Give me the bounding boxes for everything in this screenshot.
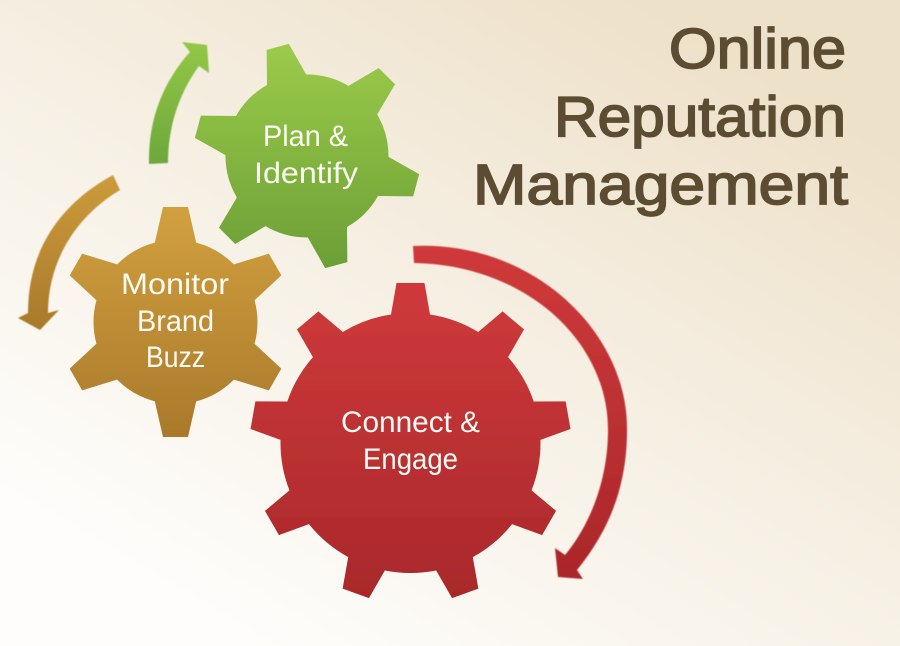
arrow: green, rising toward the top <box>149 42 209 164</box>
label: Plan & Identify: Identify <box>254 157 358 190</box>
label: Connect & Engage: Connect & <box>341 406 480 439</box>
title: Management <box>473 153 848 217</box>
gear: Monitor Brand Buzz (gold) <box>65 204 287 440</box>
title: Reputation <box>554 85 846 149</box>
gear: Plan & Identify (green) <box>190 40 422 272</box>
title <box>473 17 848 217</box>
label: Connect & Engage: Engage <box>363 443 458 476</box>
arrow: gold, curving down on the left <box>18 175 120 330</box>
label: Monitor Brand Buzz: Brand <box>137 305 214 338</box>
label: Monitor Brand Buzz: Buzz <box>146 341 205 374</box>
label: Monitor Brand Buzz: Monitor <box>121 268 229 301</box>
gear: Connect & Engage (red) <box>245 278 575 604</box>
arrow: red, sweeping around the large gear <box>413 246 627 579</box>
label: Plan & Identify <box>254 120 358 190</box>
label: Connect & Engage <box>341 406 480 476</box>
label: Plan & Identify: Plan & <box>263 120 348 153</box>
title: Online <box>669 17 846 81</box>
label: Monitor Brand Buzz <box>121 268 229 374</box>
